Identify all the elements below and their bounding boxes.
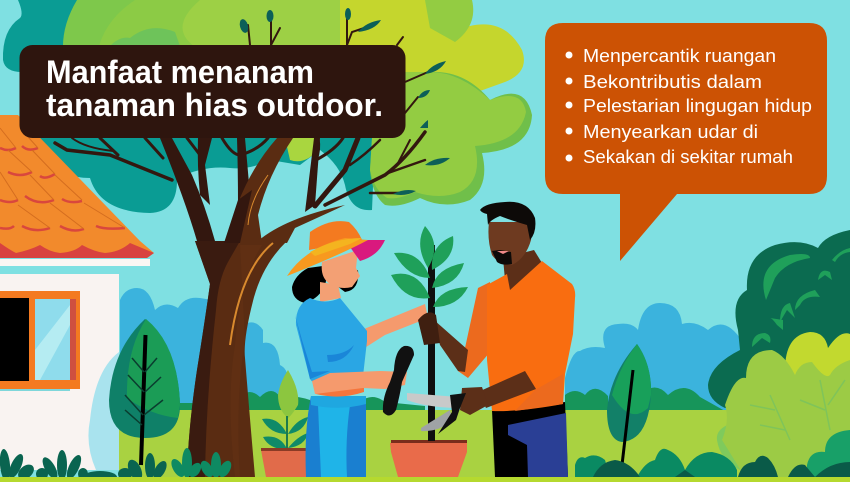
canopy: right green foliage — [425, 0, 473, 42]
black trowel — [383, 346, 414, 416]
right dark bush — [708, 230, 850, 408]
dark branches — [160, 138, 320, 241]
man: trousers — [492, 402, 568, 477]
shrub: right corner green — [807, 430, 850, 477]
tree canopy — [3, 0, 532, 213]
roof — [0, 115, 154, 258]
man: beard — [492, 250, 512, 265]
woman: lower arm — [312, 371, 407, 394]
shrubs: right dark — [593, 456, 850, 477]
list text: Menyearkan udar di — [583, 122, 758, 142]
woman: neck and face — [320, 282, 341, 302]
woman gardener — [287, 221, 428, 477]
canopy: teal lower foliage — [36, 138, 375, 213]
man: shirt — [487, 261, 575, 411]
bottom ground strip — [0, 477, 850, 482]
man: hair — [480, 202, 535, 240]
list text: Bekontributis dalam — [583, 72, 762, 92]
fascia — [0, 259, 150, 266]
canopy: green top foliage — [63, 0, 360, 50]
left potted plant — [261, 370, 311, 477]
woman: raised arm — [363, 304, 428, 349]
speech bubble: benefits list — [545, 23, 827, 261]
plant: pot — [390, 443, 467, 477]
roof eave — [0, 243, 154, 258]
shrubs along the bottom — [0, 430, 850, 482]
man: lower hand — [460, 387, 488, 415]
background: lawn — [119, 410, 850, 477]
man: lower arm — [478, 371, 536, 408]
canopy: teal top-left foliage — [3, 0, 90, 80]
man: head — [488, 222, 533, 265]
shrubs: left teal — [169, 448, 234, 479]
man: sleeve — [458, 282, 490, 378]
woman: hair — [292, 265, 358, 303]
woman: waist — [313, 385, 364, 397]
canopy: light green patch — [285, 138, 320, 161]
tree trunk and branches — [55, 8, 450, 477]
man gardener — [418, 202, 575, 477]
hat — [287, 221, 385, 276]
shrubs: left dark — [0, 449, 169, 482]
wall — [0, 274, 119, 470]
man: left hand — [418, 312, 440, 345]
trunk — [187, 241, 287, 477]
plant: leaves — [391, 226, 468, 307]
background: blue distant bushes — [120, 288, 745, 410]
pruning shears — [407, 393, 466, 434]
man: left forearm — [434, 320, 468, 372]
main potted plant — [390, 226, 468, 477]
left small tree — [109, 319, 180, 465]
canopy: lime foliage — [340, 0, 524, 100]
title box — [20, 45, 406, 138]
plant: stem — [428, 245, 435, 441]
list text — [583, 46, 812, 167]
list text: Sekakan di sekitar rumah — [583, 147, 793, 167]
thin branches — [55, 16, 428, 206]
woman: jeans — [306, 396, 366, 477]
background: green hedge line — [178, 388, 725, 411]
man: neck — [503, 250, 542, 295]
house — [0, 115, 154, 470]
list text: Menpercantik ruangan — [583, 46, 776, 66]
window — [0, 291, 80, 391]
roof tiles — [0, 146, 125, 230]
right light bush — [717, 332, 850, 477]
list text: Pelestarian lingugan hidup — [583, 96, 812, 116]
wall shadow — [88, 352, 119, 470]
right small tree — [607, 344, 651, 465]
bullet points — [566, 52, 572, 162]
branch leaves — [238, 8, 450, 195]
title text: Manfaat menanam — [46, 54, 314, 90]
title box: tanaman hias outdoor. — [46, 87, 383, 123]
shrubs: right teal — [575, 449, 737, 477]
woman: shirt — [296, 298, 367, 385]
